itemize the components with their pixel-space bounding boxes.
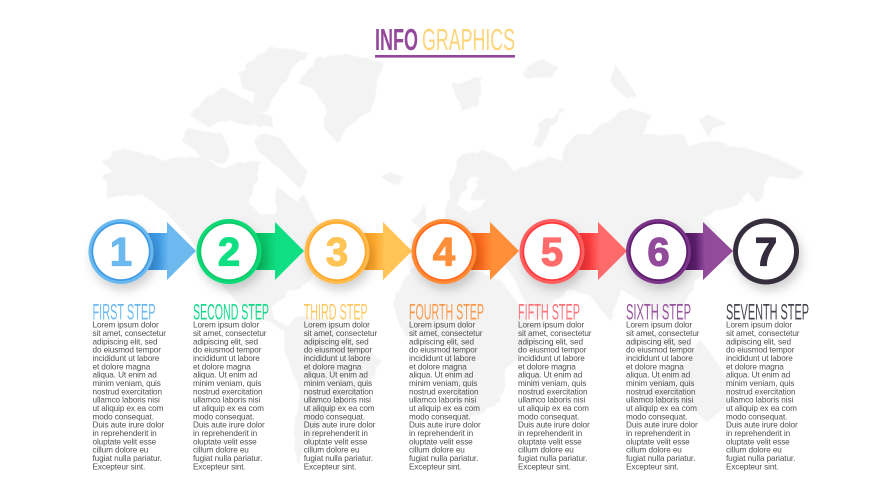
body text 6: ut aliquip ex ea com (626, 404, 697, 413)
body text 6: nostrud exercitation (626, 387, 696, 396)
body text 2: do eiusmod tempor (193, 346, 262, 355)
body text 5: aliqua. Ut enim ad (518, 371, 583, 380)
body text 3: aliqua. Ut enim ad (304, 371, 368, 380)
body text 5: modo consequat. (518, 412, 579, 421)
circle 5 (520, 219, 584, 284)
body text 2: ullamco laboris nisi (193, 396, 260, 405)
body text 6: Duis aute irure dolor (626, 421, 698, 430)
body text 4: oluptate velit esse (409, 437, 473, 446)
circle 1: 1 (110, 230, 132, 274)
body text 1: fugiat nulla pariatur. (92, 454, 162, 463)
body text 1: ut aliquip ex ea com (92, 404, 164, 413)
body text 2: aliqua. Ut enim ad (193, 371, 258, 380)
body text 6: sit amet, consectetur (626, 329, 700, 338)
arrow 3 (356, 222, 412, 280)
body text 2: oluptate velit esse (193, 437, 257, 446)
body text 6: do eiusmod tempor (626, 346, 695, 355)
body text 5: Lorem ipsum dolor (518, 321, 584, 330)
arrow 5 (571, 222, 627, 280)
body text 4: et dolore magna (409, 362, 467, 371)
body text 3: fugiat nulla pariatur. (304, 454, 373, 463)
body text 7: incididunt ut labore (726, 354, 793, 363)
body text 1: nostrud exercitation (92, 387, 162, 396)
body text 7: nostrud exercitation (726, 387, 796, 396)
circle 4: 4 (433, 230, 456, 274)
body text 3: et dolore magna (304, 362, 362, 371)
step 3: THIRD STEP (304, 300, 368, 324)
body text 3: nostrud exercitation (304, 387, 374, 396)
body text 3: minim veniam, quis (304, 379, 372, 388)
circle 7: 7 (755, 230, 777, 274)
step 6 (626, 219, 733, 471)
circle 2: 2 (218, 230, 240, 274)
body text 1: aliqua. Ut enim ad (92, 371, 157, 380)
body text 5: ullamco laboris nisi (518, 396, 585, 405)
body text 5: do eiusmod tempor (518, 346, 587, 355)
arrow 6 (678, 222, 733, 280)
body text 4: ullamco laboris nisi (409, 396, 476, 405)
body text 3: sit amet, consectetur (304, 329, 378, 338)
body text 1: sit amet, consectetur (92, 329, 166, 338)
title (375, 22, 515, 58)
body text 4: ut aliquip ex ea com (409, 404, 480, 413)
body text 4: do eiusmod tempor (409, 346, 478, 355)
body text 6: oluptate velit esse (626, 437, 690, 446)
body text 5: Excepteur sint. (518, 462, 571, 471)
body text 1: Duis aute irure dolor (92, 421, 164, 430)
body text 7: Duis aute irure dolor (726, 421, 798, 430)
body text 2: cillum dolore eu (193, 446, 249, 455)
body text 3: ullamco laboris nisi (304, 396, 371, 405)
body text 7: Excepteur sint. (726, 462, 779, 471)
heading 7: SEVENTH STEP (726, 300, 809, 324)
body text 3: oluptate velit esse (304, 437, 368, 446)
body text 5: et dolore magna (518, 362, 576, 371)
body text 1: et dolore magna (92, 362, 151, 371)
body text 1: Lorem ipsum dolor (92, 321, 159, 330)
body text 6: cillum dolore eu (626, 446, 682, 455)
body text 1: modo consequat. (92, 412, 154, 421)
body text 7: minim veniam, quis (726, 379, 794, 388)
body text 1: Excepteur sint. (92, 462, 145, 471)
body text 6: incididunt ut labore (626, 354, 693, 363)
body text 5: oluptate velit esse (518, 437, 582, 446)
body text 7: fugiat nulla pariatur. (726, 454, 795, 463)
step 7 (726, 218, 809, 471)
body text 1: cillum dolore eu (92, 446, 149, 455)
body text 5: in reprehenderit in (518, 429, 583, 438)
circle 1 (88, 219, 154, 284)
body text 7: et dolore magna (726, 362, 784, 371)
body text 4: incididunt ut labore (409, 354, 476, 363)
body text 4: fugiat nulla pariatur. (409, 454, 478, 463)
body text 2: et dolore magna (193, 362, 251, 371)
body text 3: Duis aute irure dolor (304, 421, 376, 430)
title: GRAPHICS (422, 22, 515, 57)
body text 5: adipiscing elit, sed (518, 337, 583, 346)
arrow 4 (463, 222, 519, 280)
body text 5: ut aliquip ex ea com (518, 404, 589, 413)
body text 6: modo consequat. (626, 412, 687, 421)
body text 2: minim veniam, quis (193, 379, 261, 388)
body text 4: Lorem ipsum dolor (409, 321, 475, 330)
body text 2: Excepteur sint. (193, 462, 246, 471)
body text 2: fugiat nulla pariatur. (193, 454, 262, 463)
body text 4: adipiscing elit, sed (409, 337, 474, 346)
body text 2: sit amet, consectetur (193, 329, 267, 338)
body text 3: do eiusmod tempor (304, 346, 372, 355)
body text 4: aliqua. Ut enim ad (409, 371, 474, 380)
body text 1: do eiusmod tempor (92, 346, 161, 355)
body text 7: cillum dolore eu (726, 446, 782, 455)
body text 6: in reprehenderit in (626, 429, 691, 438)
body text 2: modo consequat. (193, 412, 254, 421)
circle 3 (304, 219, 370, 284)
step 1: FIRST STEP (92, 300, 156, 324)
arrow 1 (140, 222, 196, 280)
body text 2: incididunt ut labore (193, 354, 260, 363)
body text 7: modo consequat. (726, 412, 787, 421)
body text 1: ullamco laboris nisi (92, 396, 160, 405)
body text 4: cillum dolore eu (409, 446, 465, 455)
body text 7: oluptate velit esse (726, 437, 790, 446)
circle 5: 5 (541, 230, 563, 274)
body text 3: adipiscing elit, sed (304, 337, 369, 346)
body text 4: modo consequat. (409, 412, 470, 421)
body text 3: cillum dolore eu (304, 446, 360, 455)
body text 5: nostrud exercitation (518, 387, 588, 396)
body text 5: cillum dolore eu (518, 446, 574, 455)
body text 5: incididunt ut labore (518, 354, 585, 363)
body text 2: Lorem ipsum dolor (193, 321, 259, 330)
body text 4: nostrud exercitation (409, 387, 479, 396)
body text 6: minim veniam, quis (626, 379, 694, 388)
body text 3: in reprehenderit in (304, 429, 368, 438)
body text 5: Duis aute irure dolor (518, 421, 590, 430)
circle 4 (412, 219, 476, 284)
body text 7: sit amet, consectetur (726, 329, 800, 338)
body text 5: minim veniam, quis (518, 379, 586, 388)
step 2 (193, 219, 304, 471)
body text 2: in reprehenderit in (193, 429, 258, 438)
body text 7: in reprehenderit in (726, 429, 791, 438)
body text 2: adipiscing elit, sed (193, 337, 258, 346)
body text 6: ullamco laboris nisi (626, 396, 693, 405)
step 5: FIFTH STEP (518, 300, 580, 324)
body text 7: ullamco laboris nisi (726, 396, 793, 405)
body text 7: adipiscing elit, sed (726, 337, 791, 346)
body text 3: modo consequat. (304, 412, 365, 421)
circle 2 (196, 219, 262, 284)
body text 1: adipiscing elit, sed (92, 337, 158, 346)
world map background (100, 47, 803, 463)
step 3 (304, 219, 412, 471)
body text 7: do eiusmod tempor (726, 346, 795, 355)
body text 1: incididunt ut labore (92, 354, 160, 363)
body text 4: Excepteur sint. (409, 462, 462, 471)
step 4 (409, 219, 519, 471)
body text 6: et dolore magna (626, 362, 684, 371)
body text 2: nostrud exercitation (193, 387, 263, 396)
body text 7: ut aliquip ex ea com (726, 404, 797, 413)
body text 4: sit amet, consectetur (409, 329, 483, 338)
heading 6: SIXTH STEP (626, 300, 691, 324)
body text 3: ut aliquip ex ea com (304, 404, 375, 413)
body text 6: fugiat nulla pariatur. (626, 454, 695, 463)
title: INFO (375, 22, 418, 57)
step 4: FOURTH STEP (409, 300, 484, 324)
body text 5: fugiat nulla pariatur. (518, 454, 587, 463)
body text 6: Lorem ipsum dolor (626, 321, 692, 330)
step 1 (88, 219, 196, 471)
body text 1: oluptate velit esse (92, 437, 157, 446)
circle 3: 3 (326, 230, 348, 274)
body text 7: aliqua. Ut enim ad (726, 371, 791, 380)
circle 7 (733, 218, 799, 284)
arrow 2 (248, 222, 304, 280)
body text 6: adipiscing elit, sed (626, 337, 691, 346)
step 5 (518, 219, 627, 471)
body text 2: Duis aute irure dolor (193, 421, 265, 430)
circle 6 (626, 219, 691, 284)
step 2: SECOND STEP (193, 300, 269, 324)
body text 4: Duis aute irure dolor (409, 421, 481, 430)
body text 7: Lorem ipsum dolor (726, 321, 792, 330)
body text 5: sit amet, consectetur (518, 329, 592, 338)
body text 3: Lorem ipsum dolor (304, 321, 370, 330)
body text 6: Excepteur sint. (626, 462, 679, 471)
body text 1: minim veniam, quis (92, 379, 161, 388)
body text 3: incididunt ut labore (304, 354, 371, 363)
body text 4: minim veniam, quis (409, 379, 477, 388)
body text 2: ut aliquip ex ea com (193, 404, 264, 413)
body text 6: aliqua. Ut enim ad (626, 371, 691, 380)
body text 4: in reprehenderit in (409, 429, 474, 438)
body text 3: Excepteur sint. (304, 462, 356, 471)
circle 6: 6 (647, 230, 670, 274)
body text 1: in reprehenderit in (92, 429, 157, 438)
